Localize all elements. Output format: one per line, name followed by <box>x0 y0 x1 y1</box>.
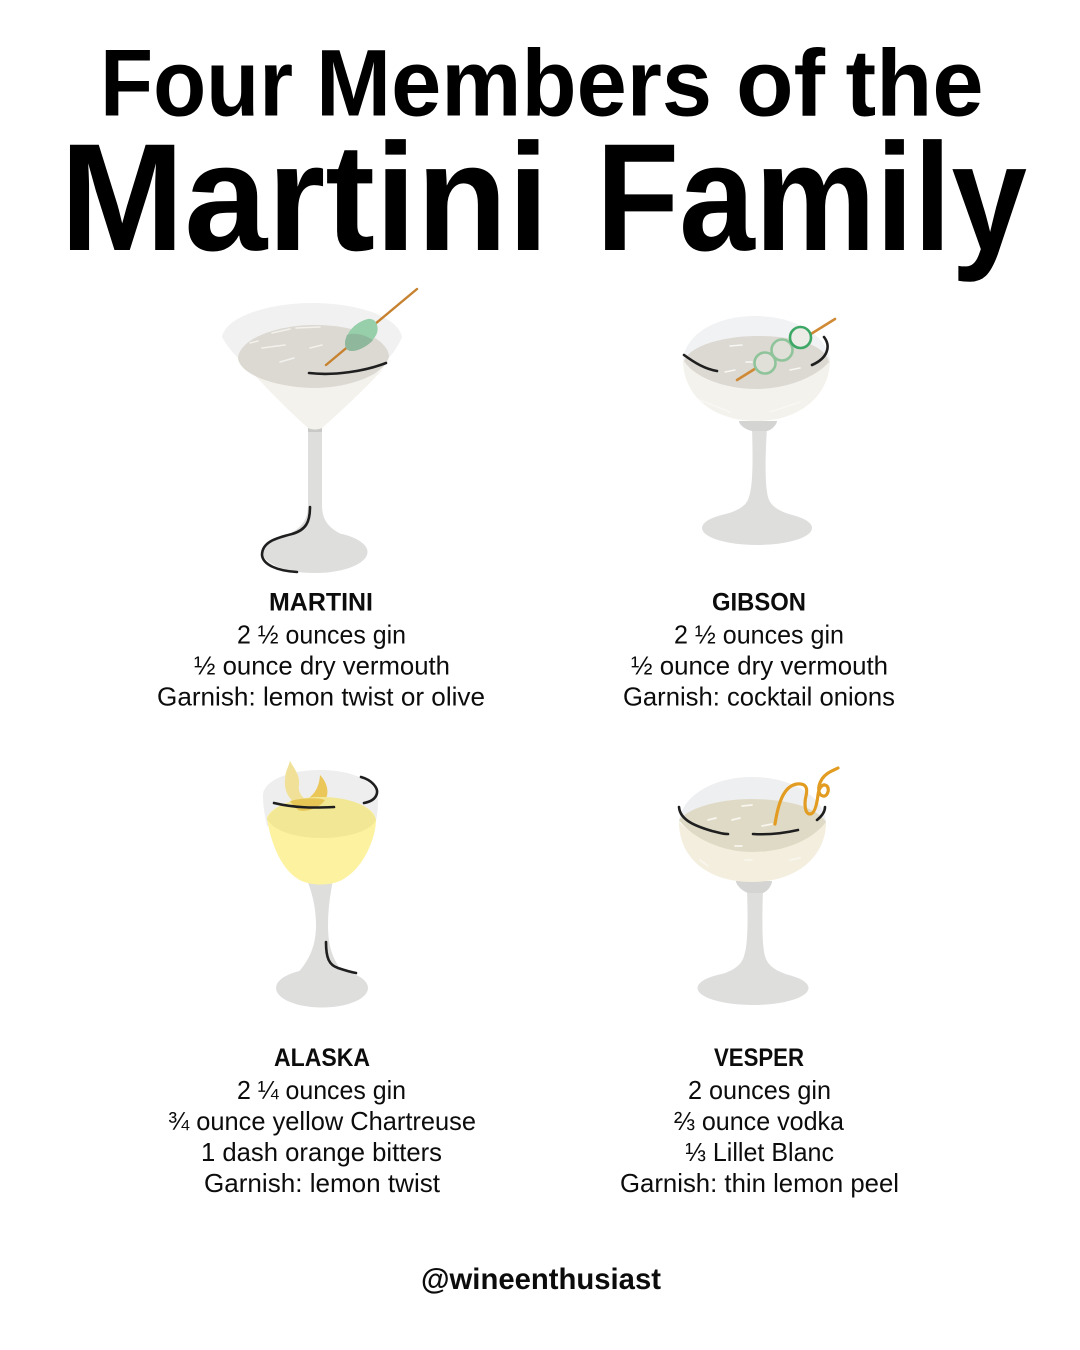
icon: martini glass <box>222 289 417 573</box>
text: gibson recipe: Garnish: cocktail onions <box>623 682 895 712</box>
title: Family <box>596 112 1027 283</box>
text: martini recipe: 2 ½ ounces gin <box>237 620 406 650</box>
text: alaska recipe: 2 ¼ ounces gin <box>237 1075 406 1105</box>
title: Martini <box>60 112 549 283</box>
text: gibson recipe: ½ ounce dry vermouth <box>631 650 888 680</box>
lemon twist garnish <box>285 761 327 806</box>
text: martini recipe: MARTINI <box>269 588 373 616</box>
text: martini recipe: Garnish: lemon twist or olive <box>157 682 485 712</box>
title <box>60 30 1027 283</box>
text: vesper recipe: 2 ounces gin <box>688 1075 831 1105</box>
text: gibson recipe: GIBSON <box>712 588 806 616</box>
text: gibson recipe <box>623 588 895 712</box>
footer handle: @wineenthusiast <box>421 1263 661 1296</box>
title: Members <box>316 30 712 136</box>
text: alaska recipe: ¾ ounce yellow Chartreuse <box>168 1106 476 1136</box>
text: martini recipe: ½ ounce dry vermouth <box>194 650 450 680</box>
olive pick garnish <box>326 289 417 365</box>
text: vesper recipe <box>620 1044 899 1198</box>
text: vesper recipe: Garnish: thin lemon peel <box>620 1168 899 1198</box>
text: vesper recipe: ⅓ Lillet Blanc <box>685 1137 834 1167</box>
icon: alaska glass <box>263 761 378 1008</box>
lemon peel spiral garnish <box>775 768 838 824</box>
text: alaska recipe: ALASKA <box>274 1044 370 1072</box>
text: gibson recipe: 2 ½ ounces gin <box>674 620 844 650</box>
text: alaska recipe: Garnish: lemon twist <box>204 1168 441 1198</box>
text: vesper recipe: VESPER <box>714 1044 804 1072</box>
text: alaska recipe <box>168 1044 476 1198</box>
icon: gibson glass <box>683 316 835 545</box>
text: vesper recipe: ⅔ ounce vodka <box>674 1106 845 1136</box>
onion pick garnish <box>737 319 835 380</box>
icon: vesper glass <box>679 768 838 1005</box>
text: martini recipe <box>157 588 485 712</box>
title: of <box>736 30 825 136</box>
text: alaska recipe: 1 dash orange bitters <box>201 1137 442 1167</box>
title: the <box>846 30 984 136</box>
title: Four <box>100 30 293 136</box>
